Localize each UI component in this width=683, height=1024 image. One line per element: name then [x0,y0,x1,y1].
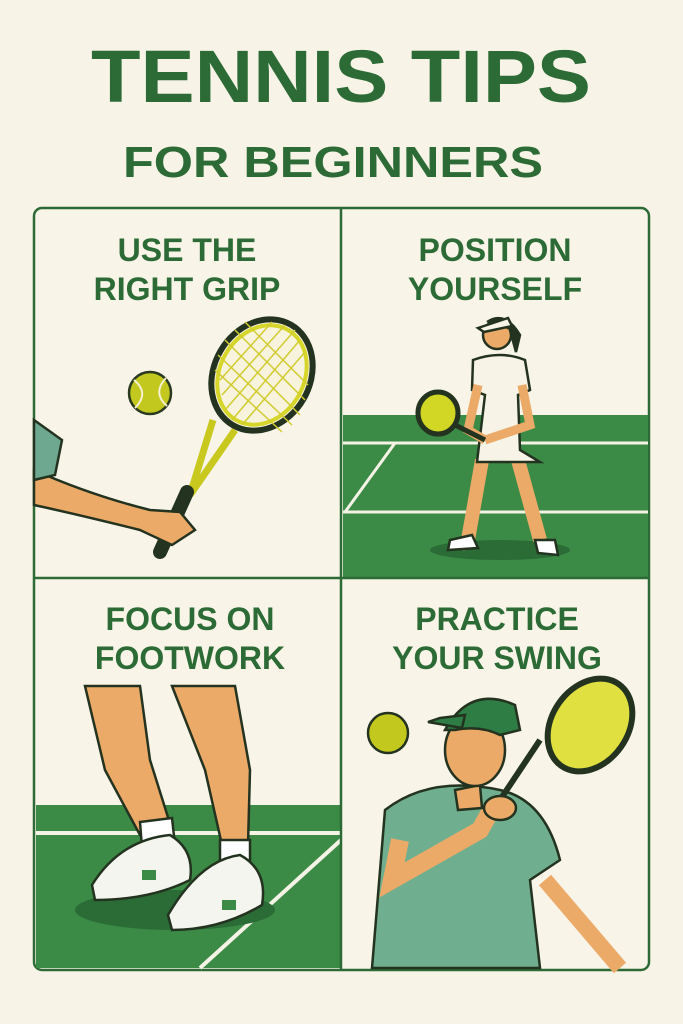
court [36,805,341,968]
heading: footwork: FOCUS ON [106,601,274,637]
court [343,415,648,577]
panel: position [343,232,648,577]
title: TENNIS TIPS [91,35,591,118]
subtitle: FOR BEGINNERS [123,138,543,187]
player [418,318,558,555]
icon: ball [368,713,408,753]
legs and shoes [85,686,263,930]
player swinging [372,662,650,968]
panel: right grip [34,232,333,552]
arm [34,420,195,545]
racket [160,301,333,552]
panel: footwork [36,601,341,968]
panel: swing [368,601,650,968]
panel: position: YOURSELF [408,271,582,307]
icon: tennis ball [129,372,171,414]
panel: swing: YOUR SWING [392,640,602,676]
dividers [35,209,648,969]
heading: position: POSITION [419,232,571,268]
panel: footwork: FOOTWORK [95,640,285,676]
heading: grip: USE THE [118,232,256,268]
panel grid [34,208,650,970]
heading: swing: PRACTICE [415,601,579,637]
panel: right grip: RIGHT GRIP [94,271,280,307]
